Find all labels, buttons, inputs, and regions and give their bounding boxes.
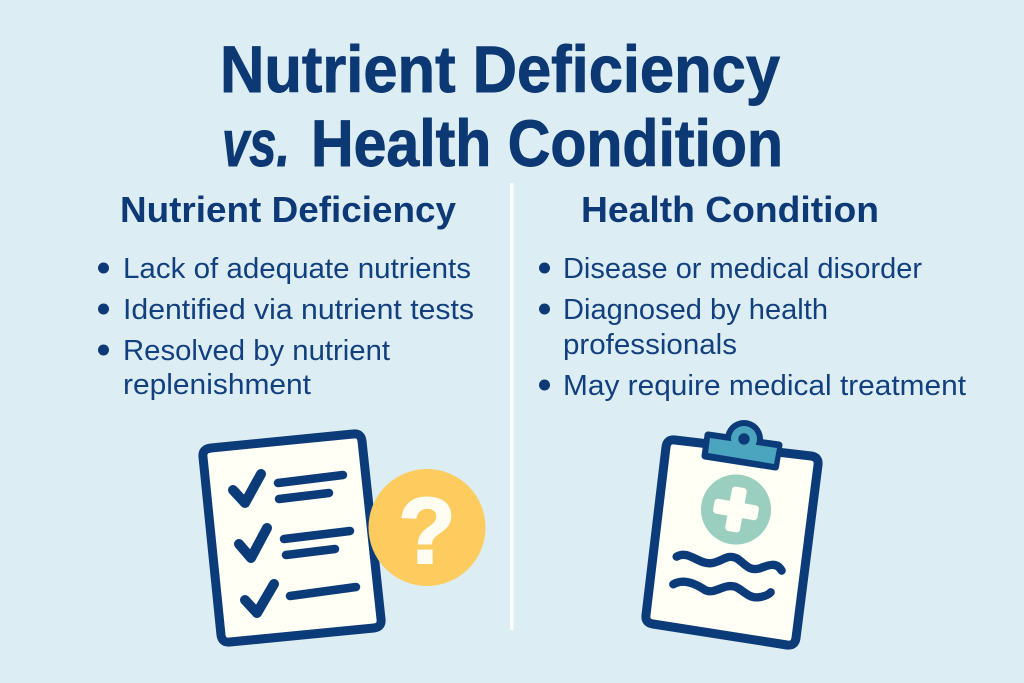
icon: check marks and lines: [233, 474, 356, 613]
bullet list: health condition: Disease or medical disorder: [563, 253, 922, 285]
icon: question mark badge: ?: [398, 478, 456, 583]
icon: checklist with question mark: [203, 434, 486, 642]
icon: wavy text lines: [673, 555, 782, 597]
icon: question mark badge: [368, 469, 486, 586]
bullet list: health condition: [539, 253, 966, 402]
icon: medical cross: [701, 474, 771, 544]
title: [220, 32, 783, 180]
bullet list: health condition: May require medical treatment: [563, 370, 966, 402]
title: Nutrient Deficiency: [220, 32, 780, 106]
bullet list: nutrient deficiency: Lack of adequate nutrients: [123, 253, 471, 285]
bullet list: health condition: professionals: [563, 329, 737, 361]
panel: health condition: [539, 189, 966, 645]
bullet list: nutrient deficiency: [98, 253, 474, 401]
heading: health condition: Health Condition: [581, 189, 879, 230]
title: Health Condition: [311, 106, 783, 180]
icon: clipboard clip: [705, 420, 779, 467]
icon: checklist paper: [203, 434, 381, 642]
bullet list: nutrient deficiency: Identified via nutrient tests: [123, 294, 474, 326]
title: vs.: [222, 106, 290, 180]
panel: nutrient deficiency: [98, 189, 486, 642]
icon: clipboard board: [646, 440, 818, 645]
heading: nutrient deficiency: Nutrient Deficiency: [120, 189, 456, 230]
bullet list: nutrient deficiency: replenishment: [123, 369, 311, 401]
bullet list: nutrient deficiency: Resolved by nutrient: [123, 335, 390, 367]
bullet list: health condition: Diagnosed by health: [563, 294, 828, 326]
icon: medical clipboard: [646, 420, 818, 645]
